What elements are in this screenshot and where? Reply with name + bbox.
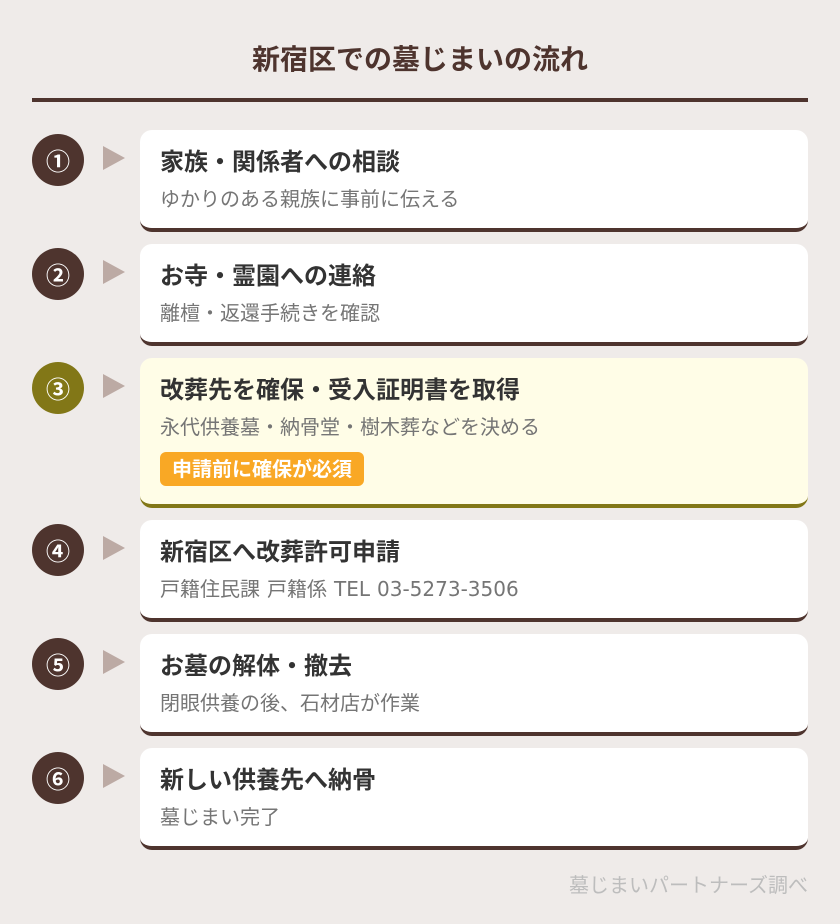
title: 新宿区での墓じまいの流れ bbox=[252, 43, 588, 76]
step 1 bbox=[32, 130, 808, 232]
step 1 number: ① bbox=[46, 142, 70, 177]
step 2 description: 離檀・返還手続きを確認 bbox=[160, 301, 380, 325]
step 5 number: ⑤ bbox=[46, 646, 70, 681]
step 4 number: ④ bbox=[46, 532, 70, 567]
step 6 description: 墓じまい完了 bbox=[160, 805, 280, 829]
step 4 arrow bbox=[103, 536, 125, 560]
step 6 number: ⑥ bbox=[46, 760, 70, 795]
step 1 arrow bbox=[103, 146, 125, 170]
step 1 number bbox=[32, 134, 84, 186]
step 2 heading: お寺・霊園への連絡 bbox=[160, 262, 376, 290]
step 2 bbox=[32, 244, 808, 346]
step 1 description: ゆかりのある親族に事前に伝える bbox=[160, 187, 459, 211]
step 2 card bbox=[140, 244, 808, 346]
step 5 description: 閉眼供養の後、石材店が作業 bbox=[160, 691, 420, 715]
step 3 number: ③ bbox=[46, 370, 70, 405]
step 4 heading: 新宿区へ改葬許可申請 bbox=[160, 538, 400, 566]
step 5 bbox=[32, 634, 808, 736]
step 6 heading: 新しい供養先へ納骨 bbox=[160, 766, 376, 794]
step 3 card bbox=[140, 358, 808, 508]
step 3 highlighted bbox=[32, 358, 808, 508]
step 6 number bbox=[32, 752, 84, 804]
step 3 badge: 申請前に確保が必須 bbox=[172, 457, 352, 481]
step 4 description: 戸籍住民課 戸籍係 TEL 03-5273-3506 bbox=[160, 577, 519, 601]
step 6 arrow bbox=[103, 764, 125, 788]
step 4 bbox=[32, 520, 808, 622]
step 3 badge bbox=[160, 452, 364, 486]
step 4 number bbox=[32, 524, 84, 576]
step 1 heading: 家族・関係者への相談 bbox=[160, 148, 400, 176]
step 4 card bbox=[140, 520, 808, 622]
step 2 arrow bbox=[103, 260, 125, 284]
step 5 arrow bbox=[103, 650, 125, 674]
step 5 card bbox=[140, 634, 808, 736]
step 5 number bbox=[32, 638, 84, 690]
step 3 number bbox=[32, 362, 84, 414]
step 3 description: 永代供養墓・納骨堂・樹木葬などを決める bbox=[160, 415, 540, 439]
source note: 墓じまいパートナーズ調べ bbox=[569, 873, 808, 897]
step 3 arrow bbox=[103, 374, 125, 398]
step 3 heading: 改葬先を確保・受入証明書を取得 bbox=[160, 376, 520, 404]
step 5 heading: お墓の解体・撤去 bbox=[160, 652, 352, 680]
step 6 bbox=[32, 748, 808, 850]
step 2 number bbox=[32, 248, 84, 300]
step 6 card bbox=[140, 748, 808, 850]
step 1 card bbox=[140, 130, 808, 232]
step 2 number: ② bbox=[46, 256, 70, 291]
